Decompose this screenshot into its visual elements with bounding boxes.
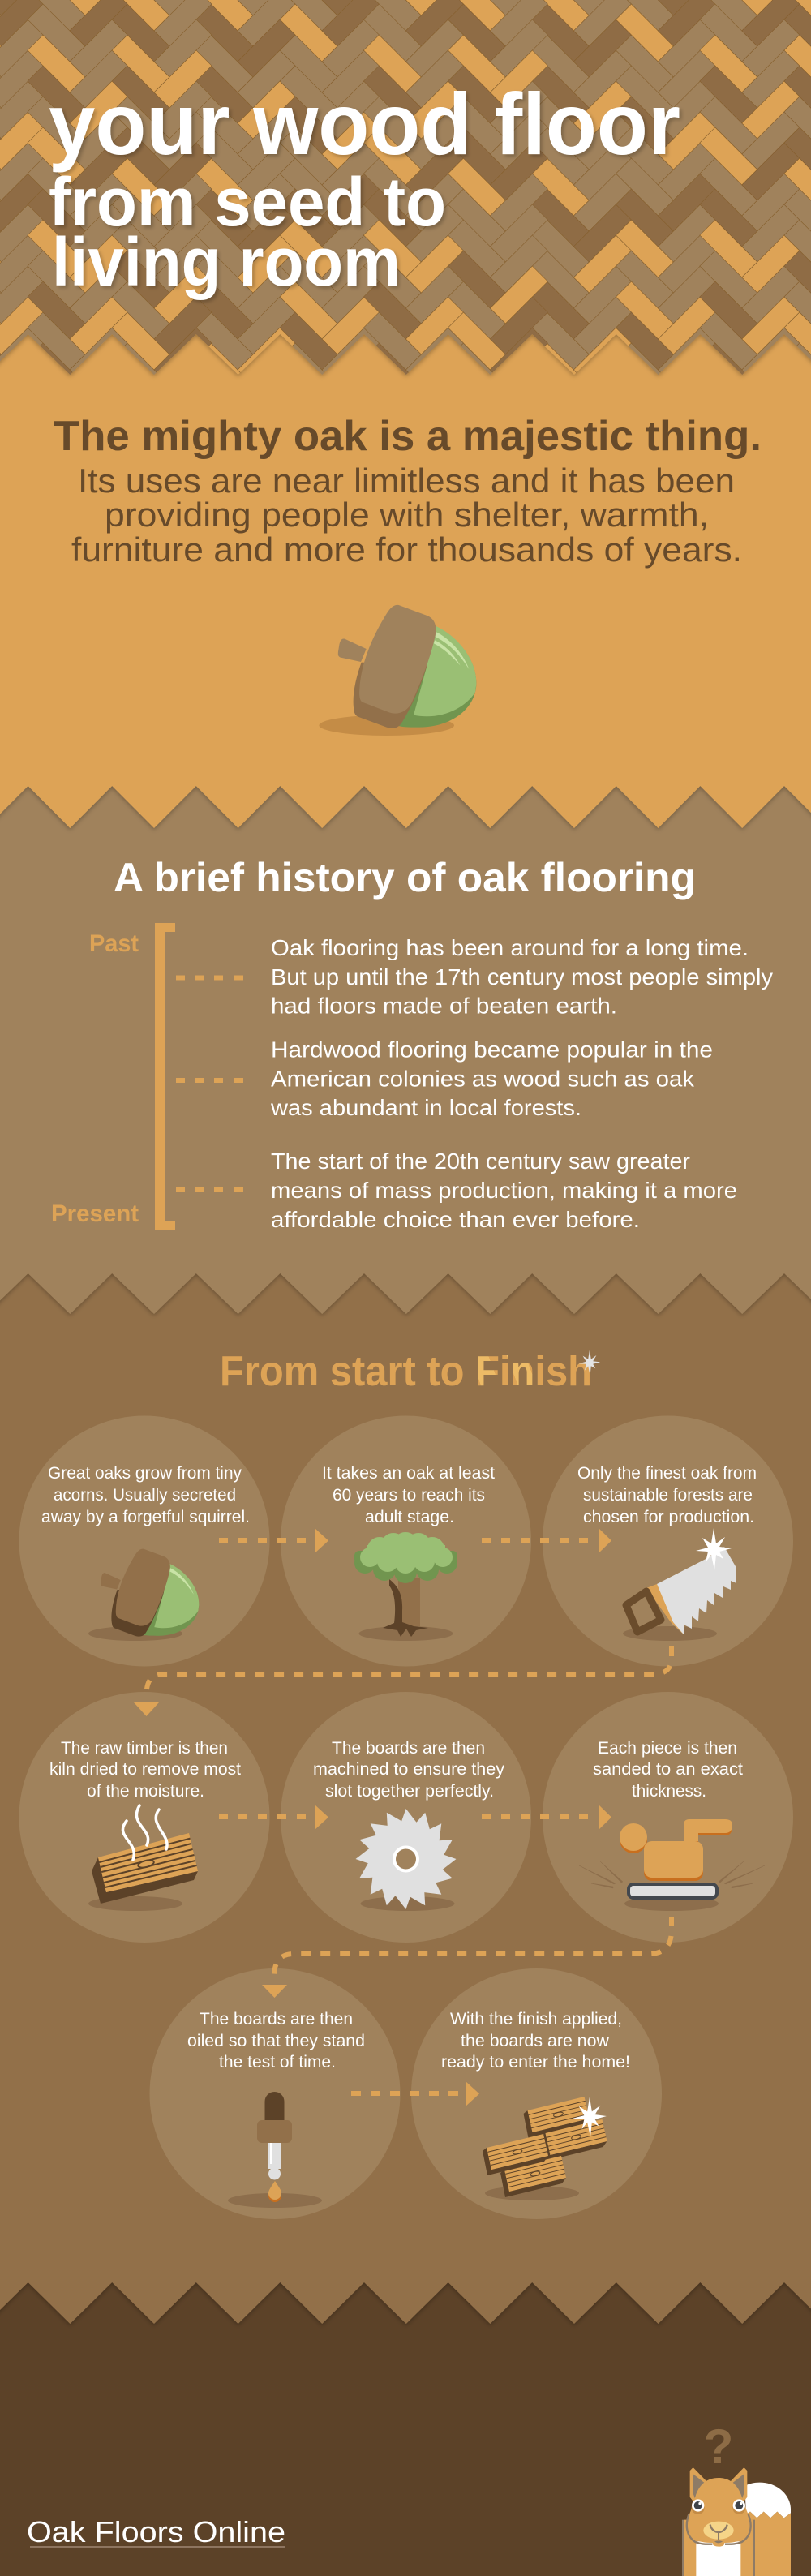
icon: small acorn [101,1549,199,1637]
squirrel mascot [682,2469,791,2576]
step 2 text: 60 years to reach its [333,1486,485,1505]
history text: second paragraph [270,1037,713,1120]
step 3 text: chosen for production. [583,1508,754,1526]
timeline labels and bracket: Present [51,1200,139,1227]
step 7 text: oiled so that they stand [187,2032,365,2050]
history text: first paragraph: But up until the 17th century most people simply [271,964,773,990]
intro text [54,413,762,569]
icon: oak tree [354,1532,457,1637]
history section background [0,0,811,1314]
step 1 text: acorns. Usually secreted [54,1486,236,1505]
step 3 text [577,1464,757,1526]
step 3 text: sustainable forests are [583,1486,753,1505]
step 5 text: machined to ensure they [313,1760,505,1779]
step 5 text [313,1739,505,1801]
step 8 text: ready to enter the home! [441,2053,630,2072]
step 8 text: the boards are now [461,2032,610,2050]
step 1 text [41,1464,250,1526]
step 7 text [187,2010,365,2072]
step 4 text [49,1739,241,1801]
icon: drying timber [92,1805,198,1904]
arrow: step 4 to 5 [219,1805,328,1830]
step 1 text: away by a forgetful squirrel. [41,1508,250,1526]
step 6 text [593,1739,743,1801]
timeline labels and bracket [51,923,243,1230]
history text: first paragraph [271,935,773,1019]
step 6 text: thickness. [632,1782,706,1801]
step 4 text: kiln dried to remove most [49,1760,241,1779]
step 2 text: It takes an oak at least [322,1464,495,1483]
icon: oil dropper [257,2092,292,2202]
ground shadows [88,1626,719,2208]
intro text: The mighty oak is a majestic thing. [54,413,762,460]
history text: first paragraph: Oak flooring has been around for a long time. [271,935,749,960]
step 8 text [441,2010,630,2072]
step 6 text: Each piece is then [598,1739,737,1758]
intro section background [0,0,811,828]
connector: row 1 to row 2 [134,1646,672,1716]
title: your wood floor [49,75,680,173]
question mark: ? [704,2419,733,2474]
history text: third paragraph: The start of the 20th century saw greater [271,1148,690,1174]
step 2 text: adult stage. [365,1508,454,1526]
arrow: step 5 to 6 [482,1805,611,1830]
step 2 text [322,1464,495,1526]
history text: second paragraph: American colonies as wood such as oak [271,1066,695,1092]
step 7 text: the test of time. [219,2053,336,2072]
intro text: Its uses are near limitless and it has been [78,462,735,500]
icon: hand saw [626,1528,736,1634]
step 5 text: slot together perfectly. [325,1782,494,1801]
step 7 text: The boards are then [200,2010,353,2029]
heading: from start to finish: From start to Finish [220,1348,592,1395]
step 4 text: of the moisture. [87,1782,204,1801]
step circles [19,1416,793,2219]
intro text: providing people with shelter, warmth, [105,496,709,534]
history text: second paragraph: was abundant in local forests. [270,1095,581,1120]
icon: circular saw blade [355,1809,456,1909]
history text: third paragraph [271,1148,737,1232]
icon: floor sander [579,1819,765,1898]
title: living room [52,224,401,300]
heading: history: A brief history of oak flooring [114,855,696,900]
arrow: step 1 to 2 [219,1528,328,1553]
history text: second paragraph: Hardwood flooring became popular in the [271,1037,713,1063]
logo: Oak Floors Online [27,2515,285,2548]
step 1 text: Great oaks grow from tiny [48,1464,242,1483]
arrow: step 7 to 8 [351,2081,479,2106]
step 3 text: Only the finest oak from [577,1464,757,1483]
icon: finished boards [483,2097,607,2197]
history text: third paragraph: affordable choice than ever before. [271,1207,640,1232]
step 8 text: With the finish applied, [450,2010,622,2029]
title: from seed to [49,164,446,240]
intro text: furniture and more for thousands of years. [71,530,742,569]
step 6 text: sanded to an exact [593,1760,743,1779]
step 5 text: The boards are then [332,1739,485,1758]
timeline labels and bracket: Past [89,930,139,957]
history text: third paragraph: means of mass production, making it a more [271,1178,737,1203]
step 4 text: The raw timber is then [61,1739,228,1758]
arrow: step 2 to 3 [482,1528,611,1553]
connector: row 2 to row 3 [262,1917,672,1998]
title [49,75,680,300]
header herringbone wood pattern [0,0,811,378]
history text: first paragraph: had floors made of beaten earth. [271,993,617,1019]
icon: large acorn [319,605,476,736]
